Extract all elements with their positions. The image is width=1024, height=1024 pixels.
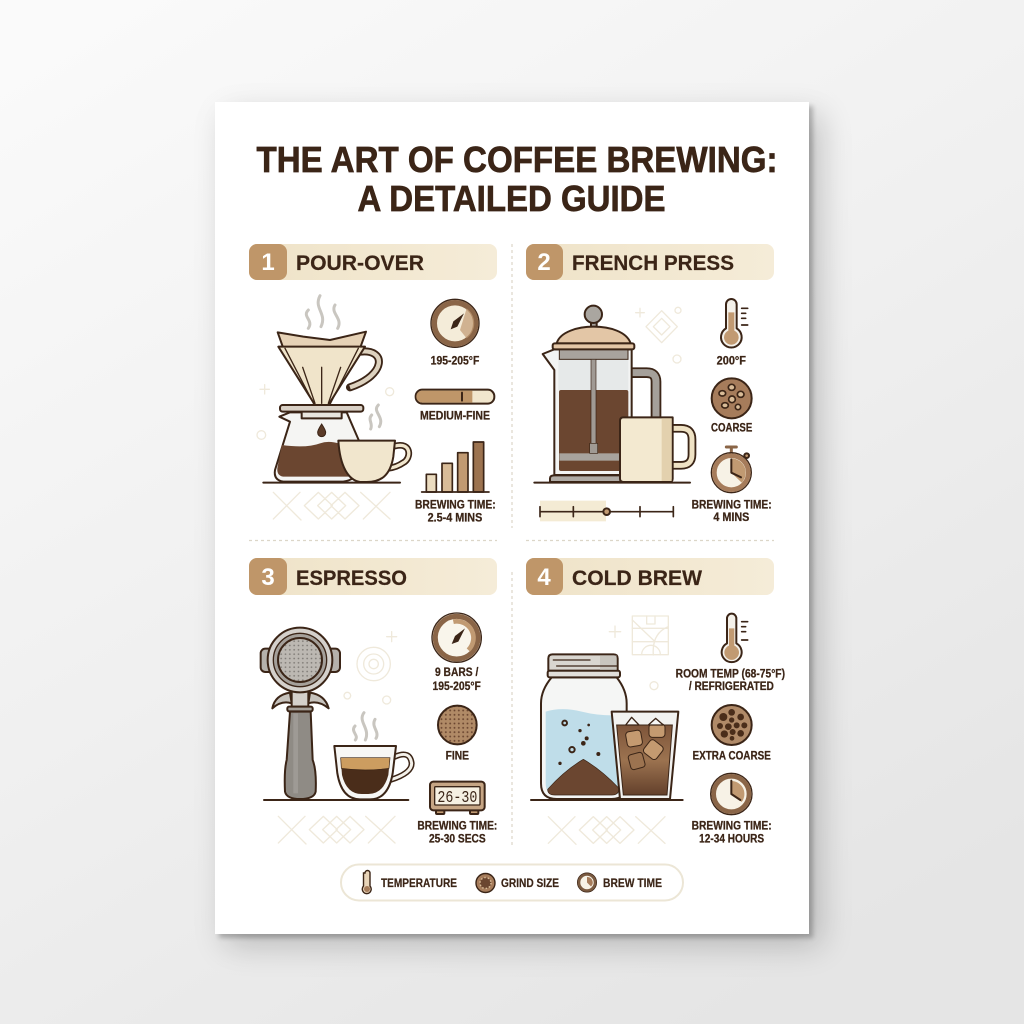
stat: grind medium-fine	[416, 390, 494, 422]
stat: brewing time 25-30 secs: BREWING TIME:	[417, 819, 497, 832]
stat: brewing time 12-34 hours: 12-34 HOURS	[699, 833, 764, 846]
stat: brewing time 25-30 secs: 26-30	[437, 789, 477, 808]
legend icon: grind	[476, 874, 495, 892]
legend icon: thermometer	[362, 870, 371, 894]
panel: cold brew	[526, 558, 785, 846]
stat: temperature room or refrigerated	[676, 614, 785, 693]
header: 2 french press	[526, 244, 774, 280]
illustration: portafilter and espresso cup	[261, 628, 412, 844]
stat: brewing time 4 mins: 4 MINS	[713, 511, 750, 524]
header: 2 french press: 2	[537, 249, 551, 276]
stat: grind fine: FINE	[446, 749, 469, 762]
title	[256, 139, 778, 219]
legend label: brew time: BREW TIME	[603, 878, 662, 890]
stat: brewing time 12-34 hours: BREWING TIME:	[692, 819, 772, 832]
title: A DETAILED GUIDE	[358, 178, 666, 219]
header: 3 espresso: ESPRESSO	[296, 567, 407, 590]
stat: temperature room or refrigerated: / REFRIGERATED	[689, 680, 774, 693]
header: 4 cold brew	[526, 558, 774, 595]
stat: pressure 9 bars: 195-205°F	[432, 680, 481, 693]
title: THE ART OF COFFEE BREWING:	[256, 139, 778, 180]
stat: grind extra coarse	[692, 705, 771, 762]
stat: temperature room or refrigerated: ROOM TEMP (68-75°F)	[676, 667, 785, 680]
stat: brewing time 2.5-4 mins: BREWING TIME:	[415, 498, 496, 511]
stat: temperature 195-205F	[431, 299, 479, 367]
timeline: steep progress	[540, 501, 673, 521]
illustration: cold brew jar and iced glass	[531, 616, 683, 844]
stat: temperature 200F	[717, 299, 748, 367]
header: 1 pour-over: 1	[261, 249, 275, 276]
stat: brewing time 4 mins	[692, 447, 772, 524]
legend label: temperature: TEMPERATURE	[381, 878, 457, 890]
illustration: french press and mug	[534, 306, 692, 483]
header: 4 cold brew: 4	[537, 564, 551, 591]
legend label: grind size: GRIND SIZE	[501, 878, 559, 890]
stat: grind medium-fine: MEDIUM-FINE	[420, 409, 490, 422]
poster card	[215, 102, 809, 934]
header: 3 espresso: 3	[261, 564, 275, 591]
header: 1 pour-over	[249, 244, 497, 280]
stat: grind fine	[438, 706, 477, 762]
poster shadow	[219, 106, 821, 946]
stat: grind extra coarse: EXTRA COARSE	[692, 749, 771, 762]
stat: brewing time 25-30 secs	[417, 782, 497, 846]
legend	[341, 864, 683, 900]
panel: french press	[526, 244, 774, 524]
stat: temperature 200F: 200°F	[717, 354, 746, 367]
stat: temperature 195-205F: 195-205°F	[431, 354, 479, 367]
stat: grind coarse: COARSE	[711, 422, 753, 435]
stat: brewing time 25-30 secs: 25-30 SECS	[429, 833, 486, 846]
stat: brewing time 2.5-4 mins	[415, 442, 496, 524]
stat: brewing time 12-34 hours	[692, 773, 772, 846]
stat: pressure 9 bars	[432, 613, 481, 693]
header: 2 french press: FRENCH PRESS	[572, 252, 734, 275]
header: 4 cold brew: COLD BREW	[572, 567, 702, 590]
illustration: pour-over dripper, carafe and cup	[257, 296, 409, 520]
stat: brewing time 4 mins: BREWING TIME:	[692, 498, 772, 511]
panel: espresso	[249, 558, 497, 846]
stat: pressure 9 bars: 9 BARS /	[435, 666, 479, 679]
legend icon: clock	[578, 873, 596, 892]
stat: brewing time 2.5-4 mins: 2.5-4 MINS	[428, 511, 483, 524]
panel: pour-over	[249, 244, 497, 524]
header: 1 pour-over: POUR-OVER	[296, 252, 424, 275]
header: 3 espresso	[249, 558, 497, 595]
stat: grind coarse	[711, 378, 753, 435]
